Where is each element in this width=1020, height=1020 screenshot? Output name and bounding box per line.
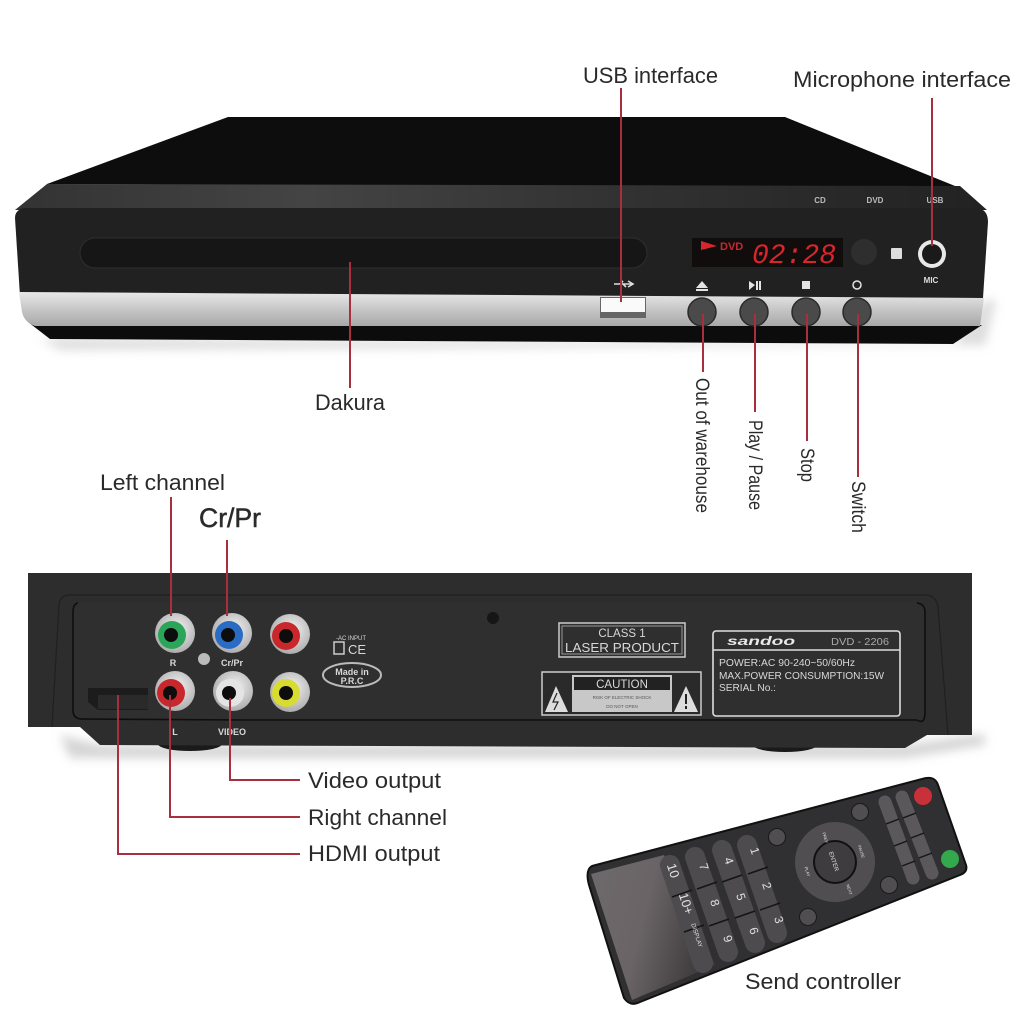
logos: USB <box>927 196 944 205</box>
top cover <box>47 117 960 188</box>
logos: CD <box>814 196 826 205</box>
label: Dakura: Dakura <box>315 390 386 415</box>
label: Video output: Video output <box>308 768 441 793</box>
spec plate <box>713 631 900 716</box>
RCA jack: yellow <box>270 672 310 712</box>
spec plate: DVD - 2206 <box>831 636 889 648</box>
RCA jack: red bottom <box>155 671 195 711</box>
certification marks: P.R.C <box>341 676 364 686</box>
control icons <box>696 281 861 291</box>
front panel <box>15 208 988 298</box>
rear DVD player <box>28 573 985 758</box>
feet <box>158 737 222 751</box>
caution label <box>542 672 701 715</box>
spec plate: SERIAL No.: <box>719 682 776 694</box>
class 1 laser label <box>559 623 685 657</box>
number keys: 7 <box>696 861 712 872</box>
class 1 laser label: LASER PRODUCT <box>565 641 679 655</box>
certification marks: Made in <box>335 667 369 677</box>
screw hole <box>487 612 499 624</box>
function key rows <box>885 797 932 878</box>
RCA jack: blue <box>212 613 252 653</box>
number keys: 8 <box>707 897 723 908</box>
number columns <box>670 845 777 963</box>
remote sheen <box>591 855 715 1000</box>
jack labels: Cr/Pr <box>221 658 243 668</box>
jack labels: R <box>170 658 177 668</box>
label: Left channel: Left channel <box>100 470 225 495</box>
upper bevel band <box>15 184 987 210</box>
label: HDMI output: HDMI output <box>308 841 440 866</box>
number keys: 5 <box>733 891 749 902</box>
jack labels <box>170 653 246 737</box>
number keys <box>664 845 787 948</box>
number keys: 3 <box>771 914 787 925</box>
navigation ring: PLAY <box>804 866 811 877</box>
number keys: 10+ <box>676 891 697 916</box>
green key <box>941 850 959 868</box>
mic jack <box>918 240 946 285</box>
logos <box>814 196 944 205</box>
display: 02:28 <box>752 241 836 272</box>
class 1 laser label: CLASS 1 <box>598 628 646 640</box>
rear body <box>28 573 972 748</box>
spec plate: sandoo <box>727 634 795 648</box>
certification marks: -AC INPUT <box>336 636 366 642</box>
navigation ring <box>795 822 875 902</box>
navigation ring: PAUSE <box>857 844 866 859</box>
small square button <box>891 248 902 259</box>
bottom edge <box>28 322 982 344</box>
navigation ring: PREV <box>821 832 830 844</box>
spec plate: POWER:AC 90-240~50/60Hz <box>719 657 855 669</box>
RCA jack: white <box>213 671 253 711</box>
power key <box>914 787 932 805</box>
label: Out of warehouse: Out of warehouse <box>691 378 712 513</box>
number keys: 9 <box>720 933 736 944</box>
spec plate: MAX.POWER CONSUMPTION:15W <box>719 670 884 682</box>
label: Cr/Pr: Cr/Pr <box>199 503 261 533</box>
display <box>692 238 843 272</box>
jack labels: VIDEO <box>218 727 246 737</box>
number keys: 2 <box>759 880 775 891</box>
label: Send controller: Send controller <box>745 969 901 994</box>
label: Microphone interface: Microphone interface <box>793 67 1011 92</box>
key separators <box>672 867 780 932</box>
leader lines: rear <box>118 497 300 854</box>
number keys: 1 <box>747 845 763 856</box>
buttons <box>688 298 871 326</box>
navigation ring: ENTER <box>827 851 839 873</box>
recessed panel <box>73 603 925 721</box>
caution label: CAUTION <box>596 679 648 691</box>
remote body <box>588 778 966 1004</box>
label: USB interface: USB interface <box>583 63 718 88</box>
HDMI port <box>88 688 148 710</box>
navigation ring: NEXT <box>845 884 854 896</box>
certification marks <box>323 636 381 687</box>
RCA jack: green <box>155 613 195 653</box>
label: Play / Pause: Play / Pause <box>744 420 765 510</box>
remote control <box>588 778 966 1004</box>
label: Switch: Switch <box>847 481 868 533</box>
RCA jack: red top <box>270 614 310 654</box>
label: Right channel: Right channel <box>308 805 447 830</box>
outer panel line <box>52 595 948 735</box>
number keys: DISPLAY <box>689 923 703 948</box>
IR sensor <box>851 239 877 265</box>
number keys: 10 <box>664 861 683 880</box>
number keys: 6 <box>746 925 762 936</box>
number keys: 4 <box>721 855 737 866</box>
display: DVD <box>720 241 743 253</box>
USB port <box>600 281 646 318</box>
logos: DVD <box>867 196 884 205</box>
function key separators <box>886 813 932 866</box>
jack labels: L <box>172 727 178 737</box>
leader lines: front <box>350 88 932 477</box>
small round keys <box>768 804 898 926</box>
front DVD player <box>15 117 996 350</box>
certification marks: CE <box>348 642 366 657</box>
mic jack: MIC <box>924 276 939 285</box>
caution label: RISK OF ELECTRIC SHOCK <box>593 695 651 700</box>
label: Stop: Stop <box>796 448 817 482</box>
silver trim <box>19 292 984 326</box>
caution label: DO NOT OPEN <box>606 704 638 709</box>
disc slot <box>80 238 647 268</box>
